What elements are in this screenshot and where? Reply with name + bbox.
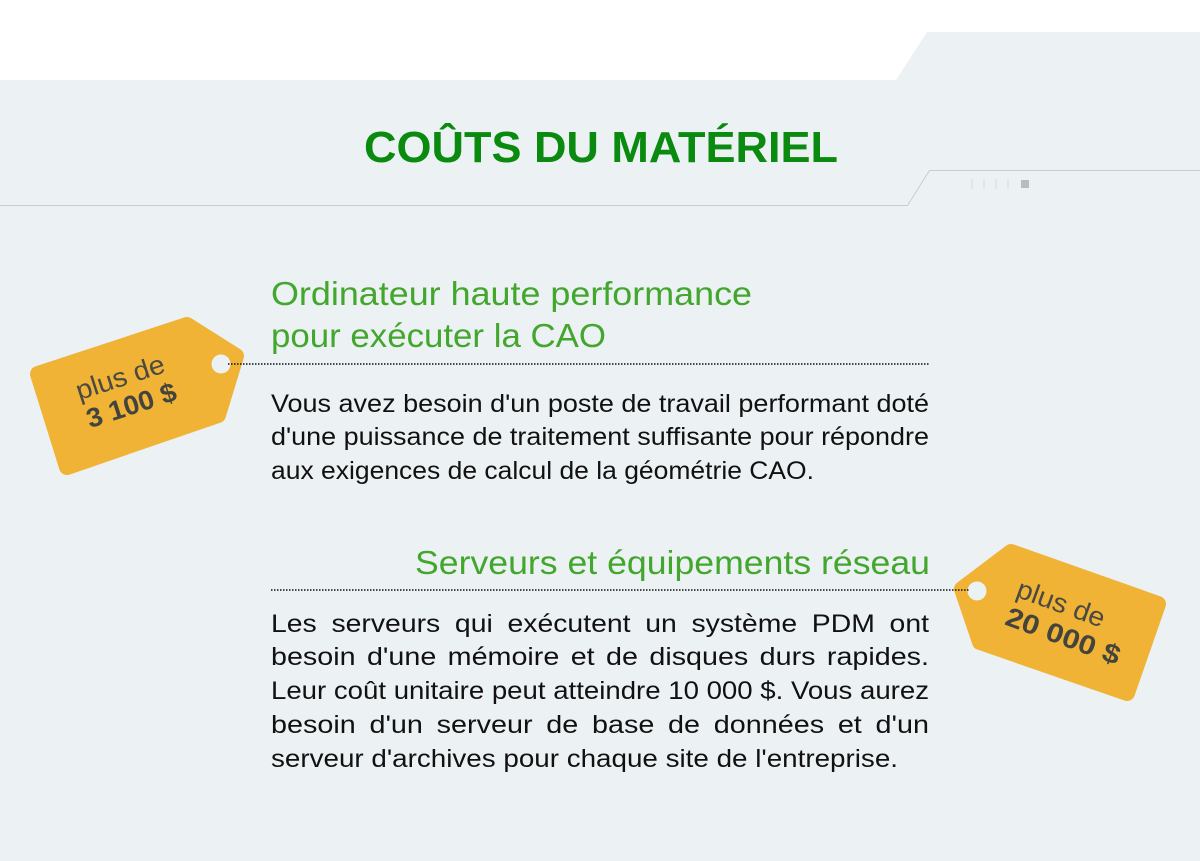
section 2 heading: Serveurs et équipements réseau xyxy=(415,544,930,581)
dotted leader 2 xyxy=(271,589,970,591)
tag 1 text: 3 100 $ xyxy=(83,377,180,434)
section 1 body text: Vous avez besoin d'un poste de travail performant doté xyxy=(271,390,929,418)
tag 2 text xyxy=(1002,573,1135,671)
tag 1 text: plus de xyxy=(72,349,169,406)
section 1 heading xyxy=(271,275,752,354)
price tag 1 xyxy=(38,325,236,467)
section 1 heading: pour exécuter la CAO xyxy=(271,317,606,354)
section 2 body text: Les serveurs qui exécutent un système PDM ont xyxy=(271,610,929,638)
section 1 heading: Ordinateur haute performance xyxy=(271,275,752,312)
tag 2 text: plus de xyxy=(1013,574,1109,633)
section 1 body text xyxy=(271,390,929,485)
title: COÛTS DU MATÉRIEL xyxy=(364,121,838,172)
section 2 body text: Leur coût unitaire peut atteindre 10 000 $. Vous aurez xyxy=(271,677,929,705)
header rule with ticks xyxy=(0,170,1200,206)
section 1 body text: aux exigences de calcul de la géométrie CAO. xyxy=(271,457,814,485)
price tag 2 xyxy=(962,552,1158,693)
section 2 body text: besoin d'une mémoire et de disques durs rapides. xyxy=(271,643,929,671)
section 1 body text: d'une puissance de traitement suffisante pour répondre xyxy=(271,423,929,451)
dotted leader 1 xyxy=(228,363,930,365)
section 2 body text xyxy=(271,610,929,773)
tag 2 text: 20 000 $ xyxy=(1002,602,1125,671)
section 2 body text: besoin d'un serveur de base de données et d'un xyxy=(271,711,929,739)
section 2: servers and network equipment xyxy=(271,544,930,773)
tag 1 text xyxy=(72,348,180,434)
section 1: high performance computer xyxy=(271,275,929,485)
section 2 body text: serveur d'archives pour chaque site de l'entreprise. xyxy=(271,745,898,773)
